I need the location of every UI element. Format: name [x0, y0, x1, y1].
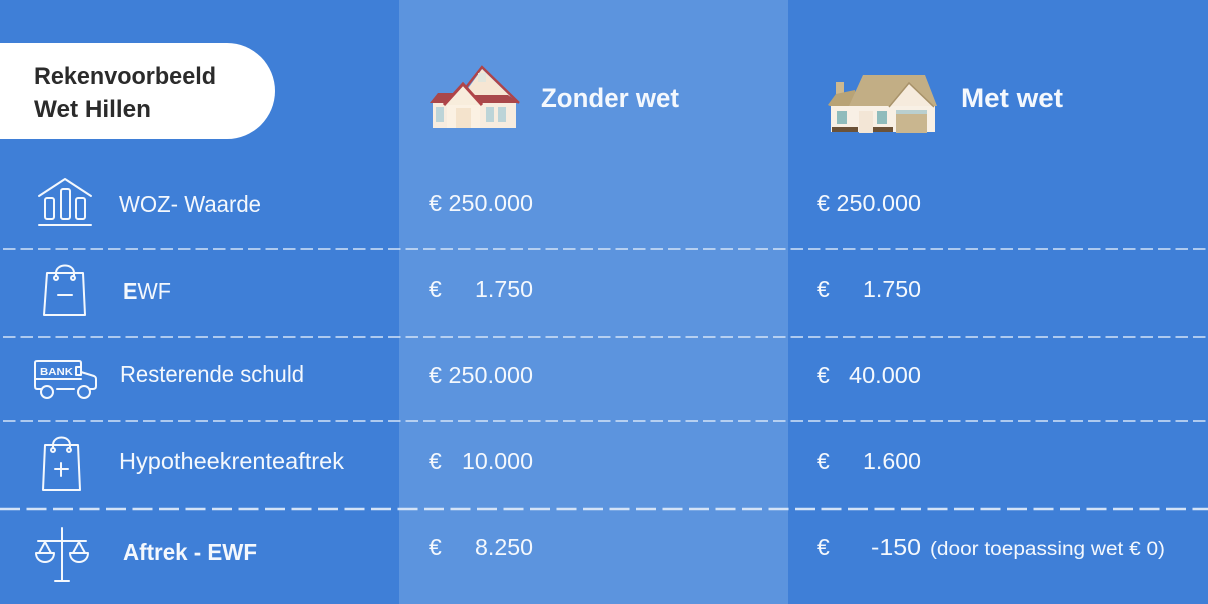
value: zonder wet EWF: 1.750 [475, 276, 533, 302]
row: EWF [44, 266, 921, 315]
icon: beige house with garage [828, 75, 937, 133]
value: met wet WOZ: € 250.000 [817, 190, 921, 216]
icon: scales [36, 528, 88, 581]
value: zonder wet resultaat: 8.250 [475, 534, 533, 560]
label: Hypotheekrenteaftrek: Hypotheekrenteaftrek [119, 448, 345, 474]
heading: Zonder wet: Zonder wet [541, 83, 679, 113]
value: met wet schuld [817, 362, 921, 388]
value: met wet resultaat: (door toepassing wet € 0) [930, 539, 1165, 560]
value: met wet schuld: 40.000 [849, 362, 921, 388]
row: Resterende schuld [35, 361, 921, 398]
value: met wet EWF: 1.750 [863, 276, 921, 302]
row: Aftrek - EWF [36, 528, 1165, 581]
value: met wet EWF [817, 276, 921, 302]
panel: Zonder wet column [399, 0, 788, 604]
icon: bank building [39, 179, 91, 225]
value: met wet EWF: € [817, 276, 830, 302]
value: zonder wet schuld: € 250.000 [429, 362, 533, 388]
value: zonder wet EWF [429, 276, 533, 302]
value: zonder wet aftrek [429, 448, 533, 474]
row: Hypotheekrenteaftrek [43, 438, 921, 490]
title pill: Wet Hillen [34, 96, 151, 123]
value: zonder wet EWF: € [429, 276, 442, 302]
value: zonder wet resultaat: € [429, 534, 442, 560]
value: met wet aftrek [817, 448, 921, 474]
icon: shopping bag plus [43, 438, 80, 490]
icon: bank van [35, 361, 96, 398]
label: WOZ-Waarde: WOZ- Waarde [119, 191, 261, 217]
value: met wet resultaat: € [817, 534, 830, 560]
value: met wet resultaat: -150 [871, 534, 921, 560]
label: EWF: EWF [123, 278, 171, 304]
heading: Met wet: Met wet [961, 83, 1063, 113]
title pill: Rekenvoorbeeld [34, 63, 216, 90]
row: WOZ-Waarde [39, 179, 921, 225]
value: zonder wet resultaat [429, 534, 533, 560]
value: zonder wet aftrek: € [429, 448, 442, 474]
value: met wet aftrek: € [817, 448, 830, 474]
label: Resterende schuld: Resterende schuld [120, 361, 304, 387]
icon: shopping bag minus [44, 266, 85, 315]
label: Aftrek - EWF: Aftrek - EWF [123, 539, 257, 565]
row dividers [0, 249, 1208, 509]
icon: red-roofed house [430, 67, 519, 128]
value: met wet aftrek: 1.600 [863, 448, 921, 474]
value: zonder wet aftrek: 10.000 [462, 448, 533, 474]
icon: bank van: BANK [40, 366, 73, 378]
value: met wet schuld: € [817, 362, 830, 388]
value: met wet resultaat [817, 534, 1165, 560]
title pill [0, 43, 275, 139]
value: zonder wet WOZ: € 250.000 [429, 190, 533, 216]
